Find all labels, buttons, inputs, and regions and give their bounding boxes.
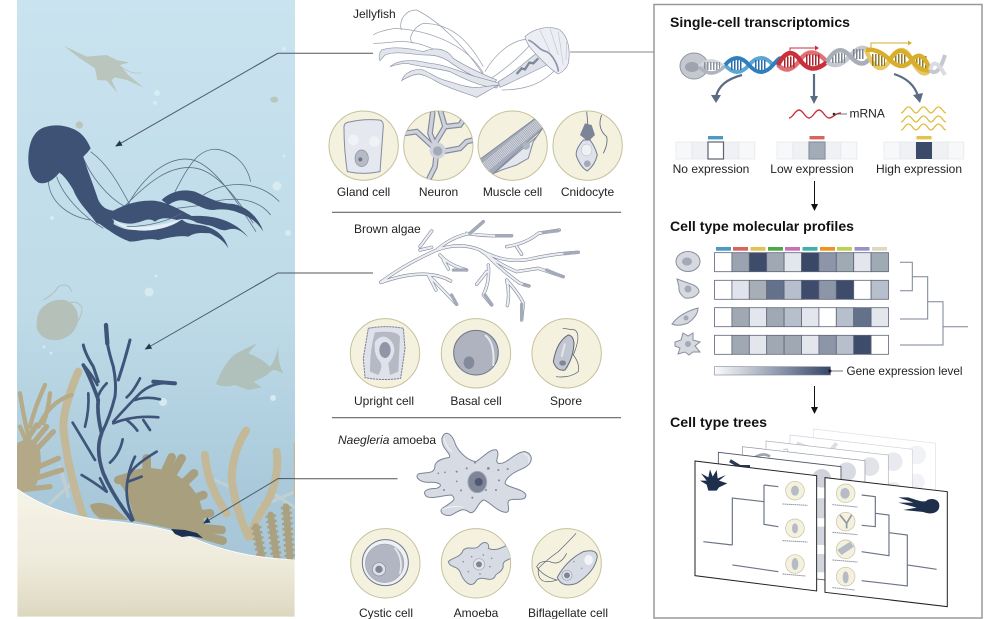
background corals	[20, 372, 295, 537]
jellyfish body and stalk	[28, 125, 115, 227]
circle: Gland cell	[329, 111, 398, 180]
thin tentacles	[373, 10, 557, 90]
connector lines to middle column	[295, 53, 398, 479]
expression labels: No expression	[673, 162, 749, 176]
bubbles	[42, 47, 291, 406]
heading: Cell type molecular profiles: Cell type molecular profiles	[670, 219, 854, 234]
helix: blue gene	[725, 58, 781, 72]
coral: feather corals right	[256, 507, 290, 558]
connector line: jellyfish to transcriptomics	[570, 51, 654, 53]
background creature: faint protist	[37, 285, 82, 340]
heatmap row 4	[714, 335, 888, 354]
expression labels: Low expression	[770, 162, 854, 176]
stacked tree sheets	[695, 429, 947, 607]
coral: large dark tan fan	[90, 457, 290, 558]
expression labels: High expression	[876, 162, 962, 176]
bell	[525, 28, 569, 74]
gene colour key	[716, 247, 887, 251]
heatmap row 3	[714, 308, 888, 327]
arrow: to molecular profiles	[811, 181, 818, 211]
cell labels: Naegleria	[359, 606, 608, 619]
front sheet: left tree	[695, 461, 817, 591]
arrow: high expression	[894, 74, 923, 103]
heatmap	[714, 253, 888, 354]
expression cells: high	[884, 136, 964, 159]
panel: jellyfish cell types	[329, 7, 654, 212]
expression labels	[673, 162, 962, 176]
mRNA low	[789, 106, 885, 120]
jellyfish silhouette	[898, 497, 939, 513]
silhouette: Naegleria on seabed	[171, 529, 203, 538]
panel: brown algae cell types	[332, 222, 621, 418]
cell labels: brown algae: Basal cell	[450, 394, 502, 408]
circle: Biflagellate cell	[532, 529, 601, 598]
cell labels: jellyfish: Cnidocyte	[561, 185, 614, 199]
expression cells: low	[777, 136, 857, 159]
arrow: yellow transcription start	[871, 43, 908, 50]
circle: Neuron	[404, 111, 473, 180]
stalk	[498, 53, 547, 87]
arrow: red transcription start	[790, 48, 815, 54]
circle: Cnidocyte	[553, 111, 622, 180]
label: Jellyfish: Jellyfish	[353, 7, 396, 21]
helix: grey end	[930, 55, 945, 75]
helix: grey middle	[827, 48, 870, 65]
arrow: no expression	[711, 75, 742, 103]
cell labels: brown algae: Spore	[550, 394, 582, 408]
arrow: to amoeba	[203, 478, 295, 524]
cell labels: jellyfish: Muscle cell	[483, 185, 542, 199]
circle: Basal cell	[441, 319, 511, 388]
heading: Single-cell transcriptomics: Single-cell transcriptomics	[670, 15, 850, 30]
circle: Amoeba	[441, 529, 515, 598]
mRNA high	[901, 107, 946, 130]
background creature: faint sea silhouette	[64, 46, 278, 129]
circle: Muscle cell	[478, 111, 547, 180]
panel: ocean scene	[17, 0, 295, 617]
arrow: to jellyfish	[115, 52, 295, 146]
heatmap row 2	[714, 280, 888, 299]
gradient legend: gene expression level	[714, 364, 962, 378]
circle: Spore	[532, 319, 601, 388]
gradient legend: gene expression level: Gene expression level	[846, 364, 962, 378]
back sheets	[718, 429, 936, 582]
helix: yellow gene	[866, 50, 930, 73]
icons: cell shapes	[672, 252, 700, 355]
cell labels: brown algae	[354, 394, 582, 408]
jellyfish tentacles	[48, 149, 279, 232]
silhouette: brown alga	[73, 325, 175, 520]
panel: methods box	[654, 4, 982, 618]
icon: cell with DNA	[680, 53, 708, 79]
arrow: to brown algae	[144, 272, 295, 350]
arrow: low expression	[810, 74, 818, 104]
background creature: faint fish	[216, 343, 283, 390]
front sheet: right tree	[825, 478, 947, 607]
sand seabed	[17, 489, 295, 617]
expression cells: none	[676, 136, 755, 159]
helix: grey start	[699, 61, 724, 73]
coral: left tan frond	[17, 425, 62, 493]
panel: Naegleria cell types	[338, 433, 608, 619]
oral arms	[379, 48, 497, 84]
jellyfish oral arm middle	[112, 201, 248, 237]
jellyfish oral arm lower	[97, 219, 228, 248]
DNA double helix	[699, 48, 945, 75]
illustration: brown algae line drawing	[381, 222, 578, 320]
helix: red gene	[778, 52, 827, 69]
label: Naegleria amoeba: Naegleria amoeba	[338, 433, 436, 447]
mRNA low: mRNA	[850, 106, 885, 120]
illustration: Naegleria amoeba	[417, 433, 531, 515]
illustration: jellyfish line drawing	[373, 10, 569, 97]
anemone silhouette	[700, 469, 727, 491]
jellyfish highlight sliver	[112, 218, 183, 231]
cell labels: jellyfish: Neuron	[419, 185, 458, 199]
dendrogram	[900, 262, 968, 345]
jellyfish oral arm upper	[162, 190, 263, 232]
label: Brown algae: Brown algae	[354, 222, 421, 236]
heatmap row 1	[714, 253, 888, 272]
cell labels: brown algae: Upright cell	[354, 394, 414, 408]
arrow: to cell type trees	[811, 386, 818, 414]
heading: Cell type trees: Cell type trees	[670, 415, 767, 430]
circle: Cystic cell	[351, 529, 420, 598]
cell labels: jellyfish: Gland cell	[337, 185, 390, 199]
circle: Upright cell	[350, 319, 420, 388]
cell labels: jellyfish	[337, 185, 614, 199]
silhouette: jellyfish	[28, 125, 279, 248]
